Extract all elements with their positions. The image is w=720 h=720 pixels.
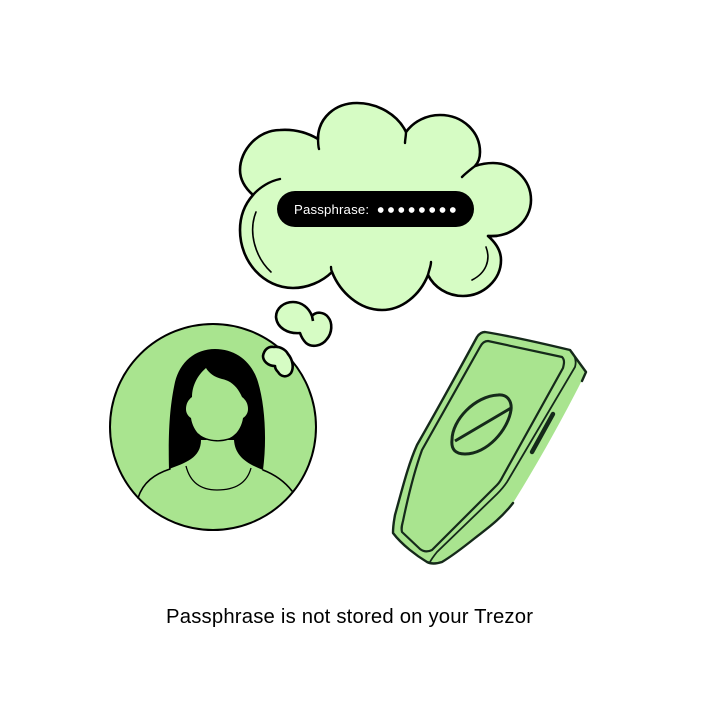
passphrase pill bbox=[277, 191, 474, 227]
passphrase label: Passphrase: bbox=[294, 202, 369, 217]
avatar circle bbox=[110, 324, 316, 530]
shoulders bbox=[138, 469, 292, 498]
device body bbox=[393, 332, 586, 564]
device: Trezor hardware wallet bbox=[393, 332, 586, 564]
necklace bbox=[186, 466, 251, 490]
masked passphrase dots bbox=[378, 207, 456, 213]
caption: Passphrase is not stored on your Trezor bbox=[166, 606, 533, 628]
cloud inner creases bbox=[253, 132, 497, 275]
device logo bbox=[452, 395, 511, 454]
face bbox=[186, 368, 248, 442]
thought bubble: medium bbox=[276, 302, 331, 346]
device side slot bbox=[532, 414, 553, 452]
device outline bbox=[393, 332, 586, 564]
cloud shape bbox=[240, 103, 531, 310]
device screen border bbox=[402, 341, 564, 551]
cloud highlights bbox=[253, 212, 488, 280]
device front edge bbox=[430, 350, 576, 562]
thought bubble: small bbox=[263, 347, 293, 376]
hair bbox=[169, 349, 265, 470]
avatar: woman in circle bbox=[110, 324, 316, 530]
panel: large thought cloud bbox=[240, 103, 531, 310]
chin line bbox=[198, 434, 236, 441]
